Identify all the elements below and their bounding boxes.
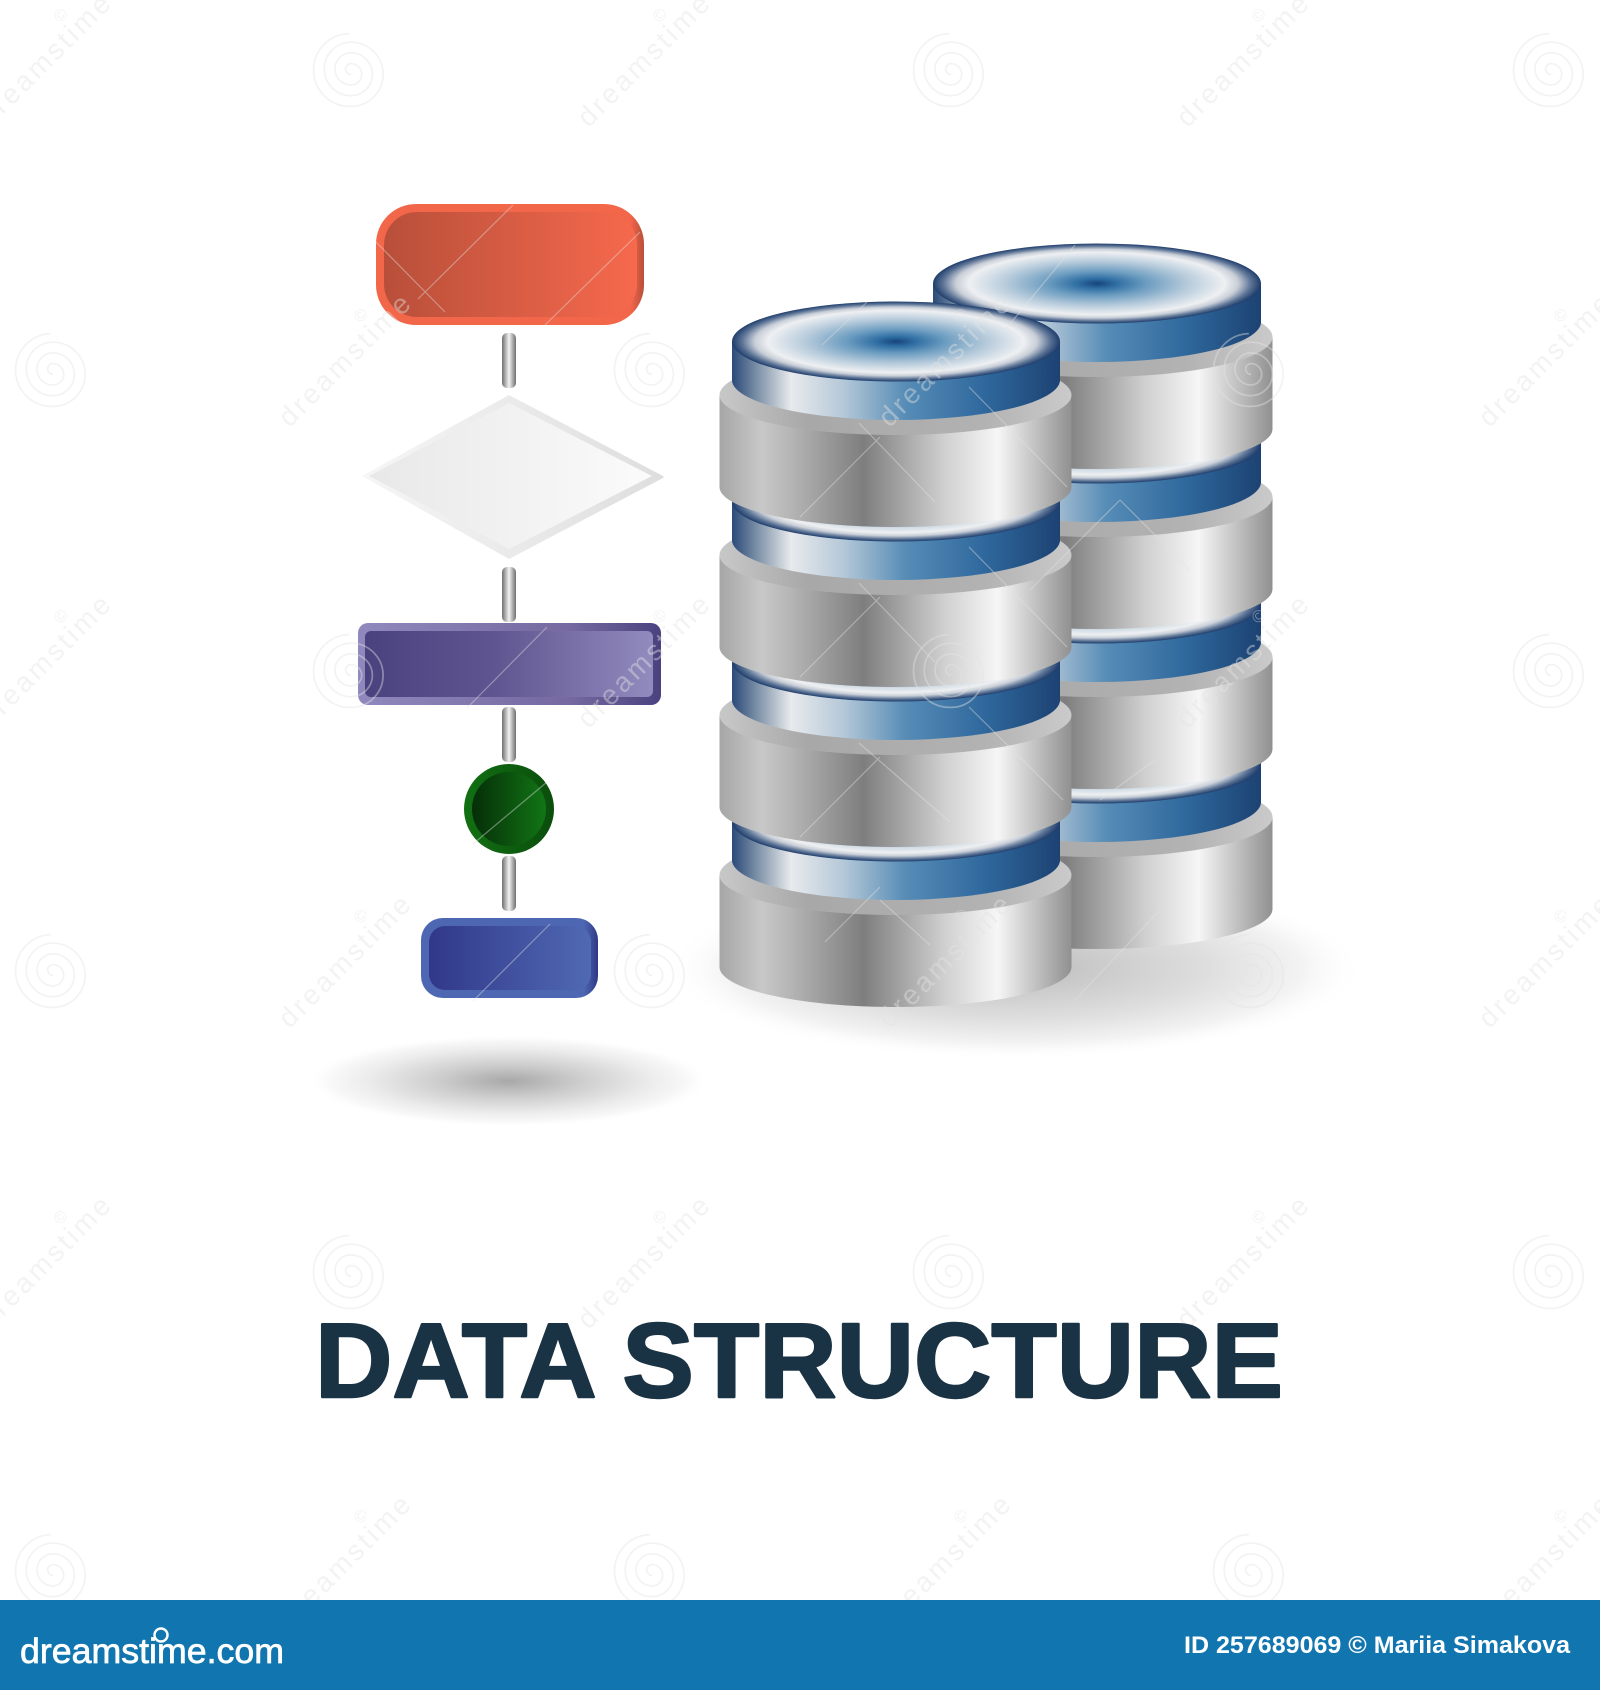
- watermark text: ©: [950, 1505, 972, 1528]
- watermark text: dreamstime: [571, 1188, 718, 1335]
- floor shadow under database: [665, 876, 1365, 1060]
- watermark cross lines: [376, 205, 1190, 1001]
- database back stack: [920, 244, 1272, 949]
- watermark text: ©: [50, 605, 72, 628]
- watermark text: ©: [1248, 605, 1270, 628]
- connector 1: [502, 333, 516, 388]
- watermark text: ©: [350, 1505, 372, 1528]
- watermark text: ©: [50, 1206, 72, 1229]
- green connector circle: [464, 764, 554, 854]
- red rounded terminator box: [376, 204, 644, 325]
- watermark text: dreamstime: [1170, 587, 1317, 734]
- watermark text: dreamstime: [872, 1487, 1019, 1634]
- watermark text: ©: [649, 1206, 671, 1229]
- watermark text: dreamstime: [272, 286, 419, 433]
- watermark text: ©: [950, 905, 972, 928]
- white decision diamond: [362, 395, 664, 559]
- connector 3: [502, 707, 516, 762]
- watermark text: dreamstime: [272, 1487, 419, 1634]
- watermark text: ©: [1248, 1206, 1270, 1229]
- watermark text: ©: [1550, 1505, 1572, 1528]
- image id and credit: ID 257689069 © Mariia Simakova: [1184, 1632, 1571, 1659]
- watermark text: dreamstime: [272, 887, 419, 1034]
- watermark text: dreamstime: [571, 587, 718, 734]
- watermark text: ©: [1550, 905, 1572, 928]
- watermark text: ©: [1550, 304, 1572, 327]
- watermark text: ©: [649, 605, 671, 628]
- connector 2: [502, 567, 516, 622]
- purple process bar: [358, 623, 661, 705]
- title: DATA STRUCTURE: [315, 1302, 1283, 1420]
- connector 4: [502, 856, 516, 911]
- logo swirl icon: [154, 1628, 168, 1642]
- watermark text: ©: [350, 905, 372, 928]
- watermark text: ©: [649, 4, 671, 27]
- watermark text: ©: [950, 304, 972, 327]
- watermark text: dreamstime: [1170, 1188, 1317, 1335]
- blue rounded end box: [421, 918, 598, 998]
- watermark text: dreamstime: [872, 286, 1019, 433]
- watermark text: ©: [50, 4, 72, 27]
- watermark text: ©: [1248, 4, 1270, 27]
- dreamstime logo text: dreamstime.com: [20, 1632, 284, 1671]
- database front stack: [720, 302, 1072, 1007]
- footer bar: [0, 1600, 1600, 1690]
- floor shadow under flowchart: [307, 1035, 711, 1127]
- flowchart diagram: [358, 204, 664, 998]
- watermark text: ©: [350, 304, 372, 327]
- watermark text: dreamstime: [872, 887, 1019, 1034]
